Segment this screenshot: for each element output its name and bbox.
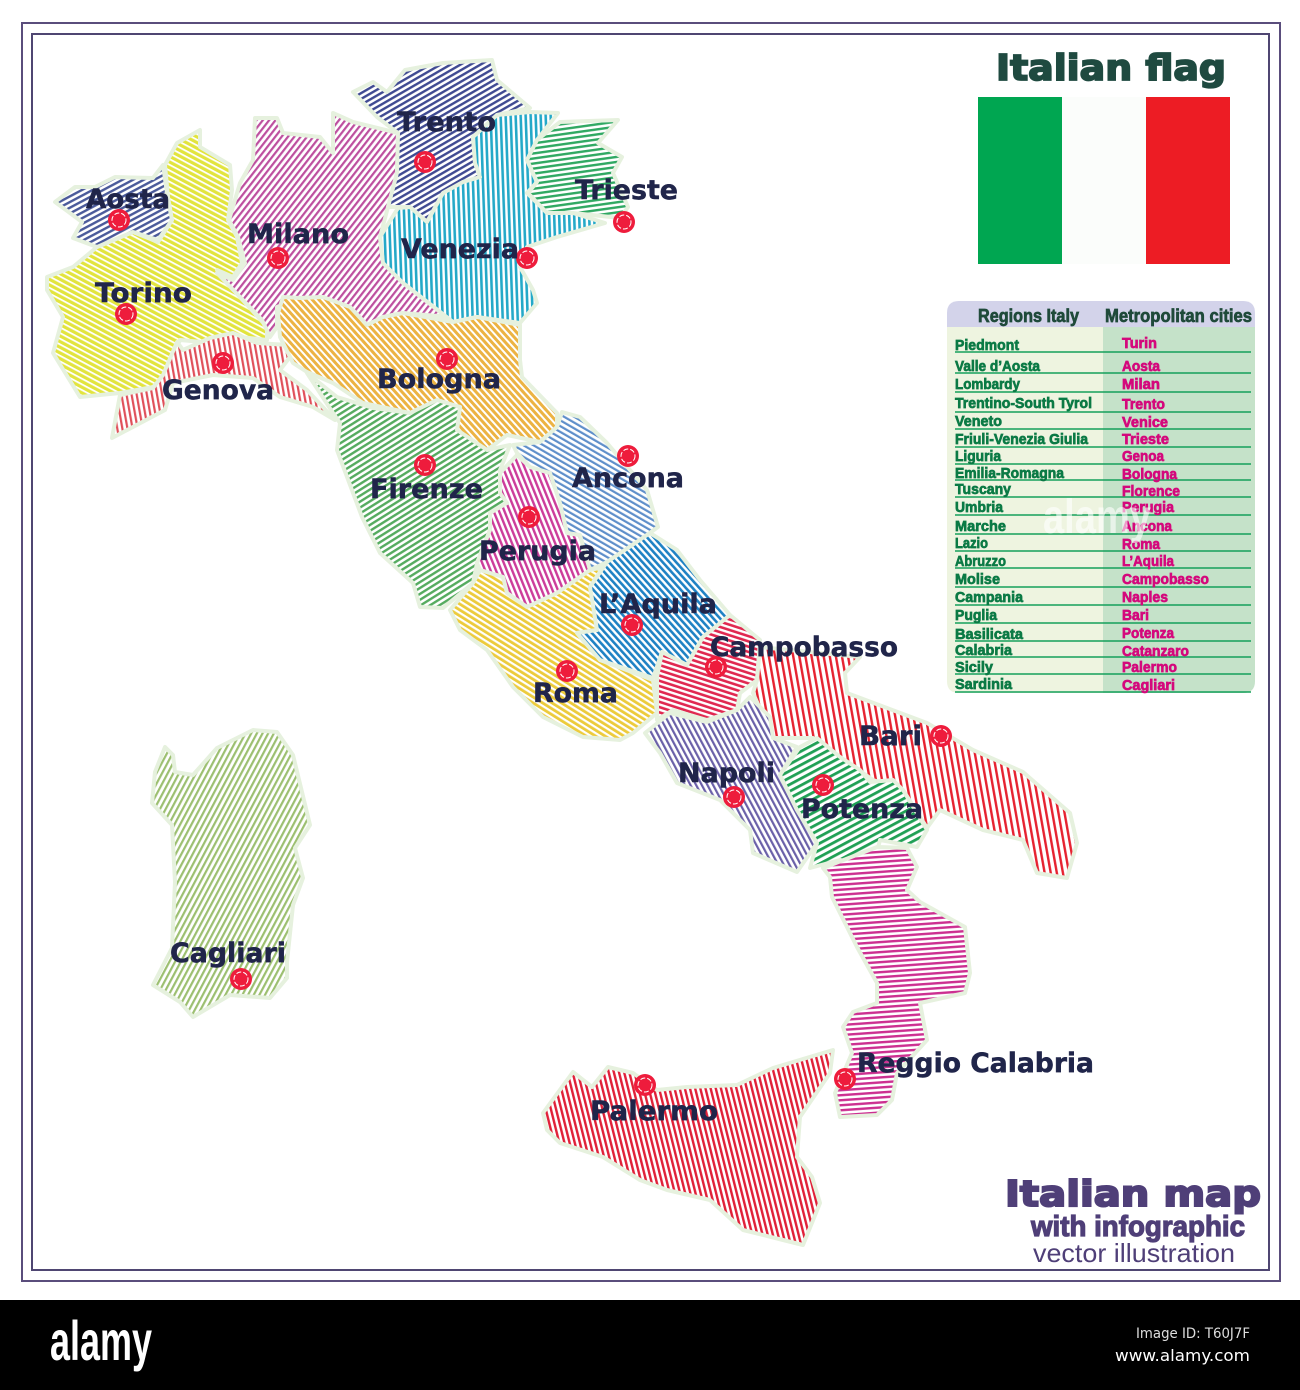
region: Campania (645, 697, 817, 872)
marker: Bologna (436, 348, 458, 370)
metropolitan cities column: Roma (1122, 536, 1161, 553)
header: Regions Italy: Regions Italy (978, 306, 1079, 326)
marker: Perugia (518, 506, 540, 528)
marker: Torino (115, 303, 137, 325)
region names column: Calabria (955, 642, 1013, 659)
region: Emilia-Romagna (278, 297, 557, 450)
region names column: Tuscany (955, 481, 1012, 498)
region: Veneto (380, 112, 605, 323)
metropolitan cities column: Perugia (1122, 499, 1175, 516)
region: Lazio (450, 567, 657, 740)
row lines (955, 352, 1251, 692)
metropolitan cities column: Catanzaro (1122, 643, 1189, 660)
label: Reggio Calabria: Reggio Calabria (857, 1048, 1094, 1079)
heading: Italian flag: Italian flag (996, 48, 1226, 89)
label: Campobasso: Campobasso (710, 632, 898, 663)
marker: Napoli (723, 786, 745, 808)
region names column: Piedmont (955, 337, 1019, 354)
region: Tuscany (307, 373, 510, 608)
region: Piedmont (47, 130, 267, 397)
region names column: Trentino-South Tyrol (955, 395, 1092, 412)
marker: Ancona (617, 445, 639, 467)
region: Lombardy (217, 113, 450, 337)
metropolitan cities column: Potenza (1122, 625, 1175, 642)
region names column: Abruzzo (955, 553, 1006, 570)
metropolitan cities column: Bari (1122, 607, 1149, 624)
label: Bari: Bari (859, 721, 922, 752)
region: Marche (513, 412, 658, 570)
region names column: Lombardy (955, 376, 1021, 393)
metropolitan cities column (1122, 335, 1209, 694)
watermark over table: alamy (1043, 491, 1151, 544)
region: Trentino-South Tyrol (353, 60, 530, 222)
region names column: Marche (955, 518, 1006, 535)
label: Palermo: Palermo (590, 1096, 718, 1127)
region names column: Friuli-Venezia Giulia (955, 431, 1089, 448)
region names column: Umbria (955, 499, 1004, 516)
label: Perugia: Perugia (479, 536, 596, 567)
marker: Cagliari (230, 968, 252, 990)
region: Sicily (543, 1050, 833, 1245)
region names column: Valle d’Aosta (955, 358, 1041, 375)
region: Calabria (823, 847, 970, 1117)
panel: regions table (947, 301, 1255, 694)
marker: Venezia (516, 247, 538, 269)
metropolitan cities column: Trento (1122, 396, 1165, 413)
right column background (1103, 320, 1255, 693)
table header background (947, 301, 1255, 327)
region names column: Campania (955, 589, 1024, 606)
marker: Genova (212, 352, 234, 374)
region names column: Molise (955, 571, 1000, 588)
label: Torino: Torino (95, 278, 192, 309)
metropolitan cities column: Naples (1122, 589, 1168, 606)
title: Italian map: Italian map (1005, 1174, 1261, 1215)
left column background (947, 320, 1103, 693)
label: Potenza: Potenza (801, 794, 923, 825)
region: Puglia (753, 647, 1077, 878)
region names column (955, 337, 1092, 693)
marker: Firenze (414, 454, 436, 476)
metropolitan cities column: Campobasso (1122, 571, 1209, 588)
marker: Trieste (613, 211, 635, 233)
region names column: Lazio (955, 535, 988, 552)
metropolitan cities column: Florence (1122, 483, 1180, 500)
metropolitan cities column: Milan (1122, 376, 1160, 393)
region: Umbria (477, 455, 590, 607)
marker: Roma (556, 660, 578, 682)
Italian flag (978, 97, 1230, 264)
region: Sardinia (152, 730, 310, 1017)
region names column: Sicily (955, 659, 994, 676)
region: Abruzzo (577, 533, 730, 678)
region names column: Basilicata (955, 626, 1024, 643)
metropolitan cities column: Aosta (1122, 358, 1161, 375)
metropolitan cities column: Bologna (1122, 466, 1178, 483)
region: Friuli-Venezia Giulia (527, 120, 628, 218)
region: Valle d'Aosta (55, 165, 172, 247)
label: Trieste: Trieste (575, 175, 678, 206)
logo: alamy: alamy (50, 1309, 152, 1372)
map of Italy regions (47, 60, 1077, 1245)
region names column: Puglia (955, 607, 998, 624)
marker: Reggio Calabria (834, 1068, 856, 1090)
region names column: Veneto (955, 413, 1002, 430)
region names column: Liguria (955, 448, 1002, 465)
marker: Milano (267, 247, 289, 269)
label: Ancona: Ancona (572, 463, 684, 494)
website: www.alamy.com (1115, 1346, 1250, 1365)
label: Cagliari: Cagliari (170, 938, 286, 969)
city labels (86, 107, 1094, 1127)
label: Genova: Genova (162, 375, 274, 406)
marker: L'Aquila (621, 614, 643, 636)
metropolitan cities column: Ancona (1122, 518, 1173, 535)
metropolitan cities column: Cagliari (1122, 677, 1175, 694)
label: Napoli: Napoli (678, 758, 775, 789)
metropolitan cities column: Genoa (1122, 448, 1165, 465)
metropolitan cities column: Trieste (1122, 431, 1169, 448)
region: Molise (657, 615, 760, 720)
subtitle: with infographic: with infographic (1030, 1211, 1245, 1243)
marker: Campobasso (705, 656, 727, 678)
label: Aosta: Aosta (86, 184, 170, 215)
image id: Image ID: T60J7F (1136, 1326, 1250, 1342)
region names column: Sardinia (955, 676, 1013, 693)
marker: Bari (930, 725, 952, 747)
label: Milano: Milano (247, 219, 349, 250)
title block: Italian map with infographic (1005, 1174, 1261, 1268)
footer bar (0, 1300, 1300, 1390)
marker: Palermo (634, 1074, 656, 1096)
label: L'Aquila: L’Aquila (599, 589, 717, 620)
marker: Trento (414, 151, 436, 173)
region: Basilicata (780, 738, 927, 868)
region: Liguria (112, 333, 335, 438)
metropolitan cities column: Palermo (1122, 659, 1177, 676)
header: Metropolitan cities: Metropolitan cities (1105, 306, 1252, 326)
metropolitan cities column: L’Aquila (1122, 553, 1175, 570)
label: Trento: Trento (397, 107, 496, 138)
city markers (108, 151, 952, 1096)
region names column: Emilia-Romagna (955, 465, 1065, 482)
label: Venezia: Venezia (401, 234, 519, 265)
label: Roma: Roma (533, 678, 618, 709)
metropolitan cities column: Turin (1122, 335, 1157, 352)
caption: vector illustration: vector illustration (1033, 1238, 1235, 1268)
metropolitan cities column: Venice (1122, 414, 1168, 431)
label: Bologna: Bologna (377, 364, 501, 395)
label: Firenze: Firenze (370, 474, 483, 505)
marker: Potenza (812, 774, 834, 796)
marker: Aosta (108, 209, 130, 231)
